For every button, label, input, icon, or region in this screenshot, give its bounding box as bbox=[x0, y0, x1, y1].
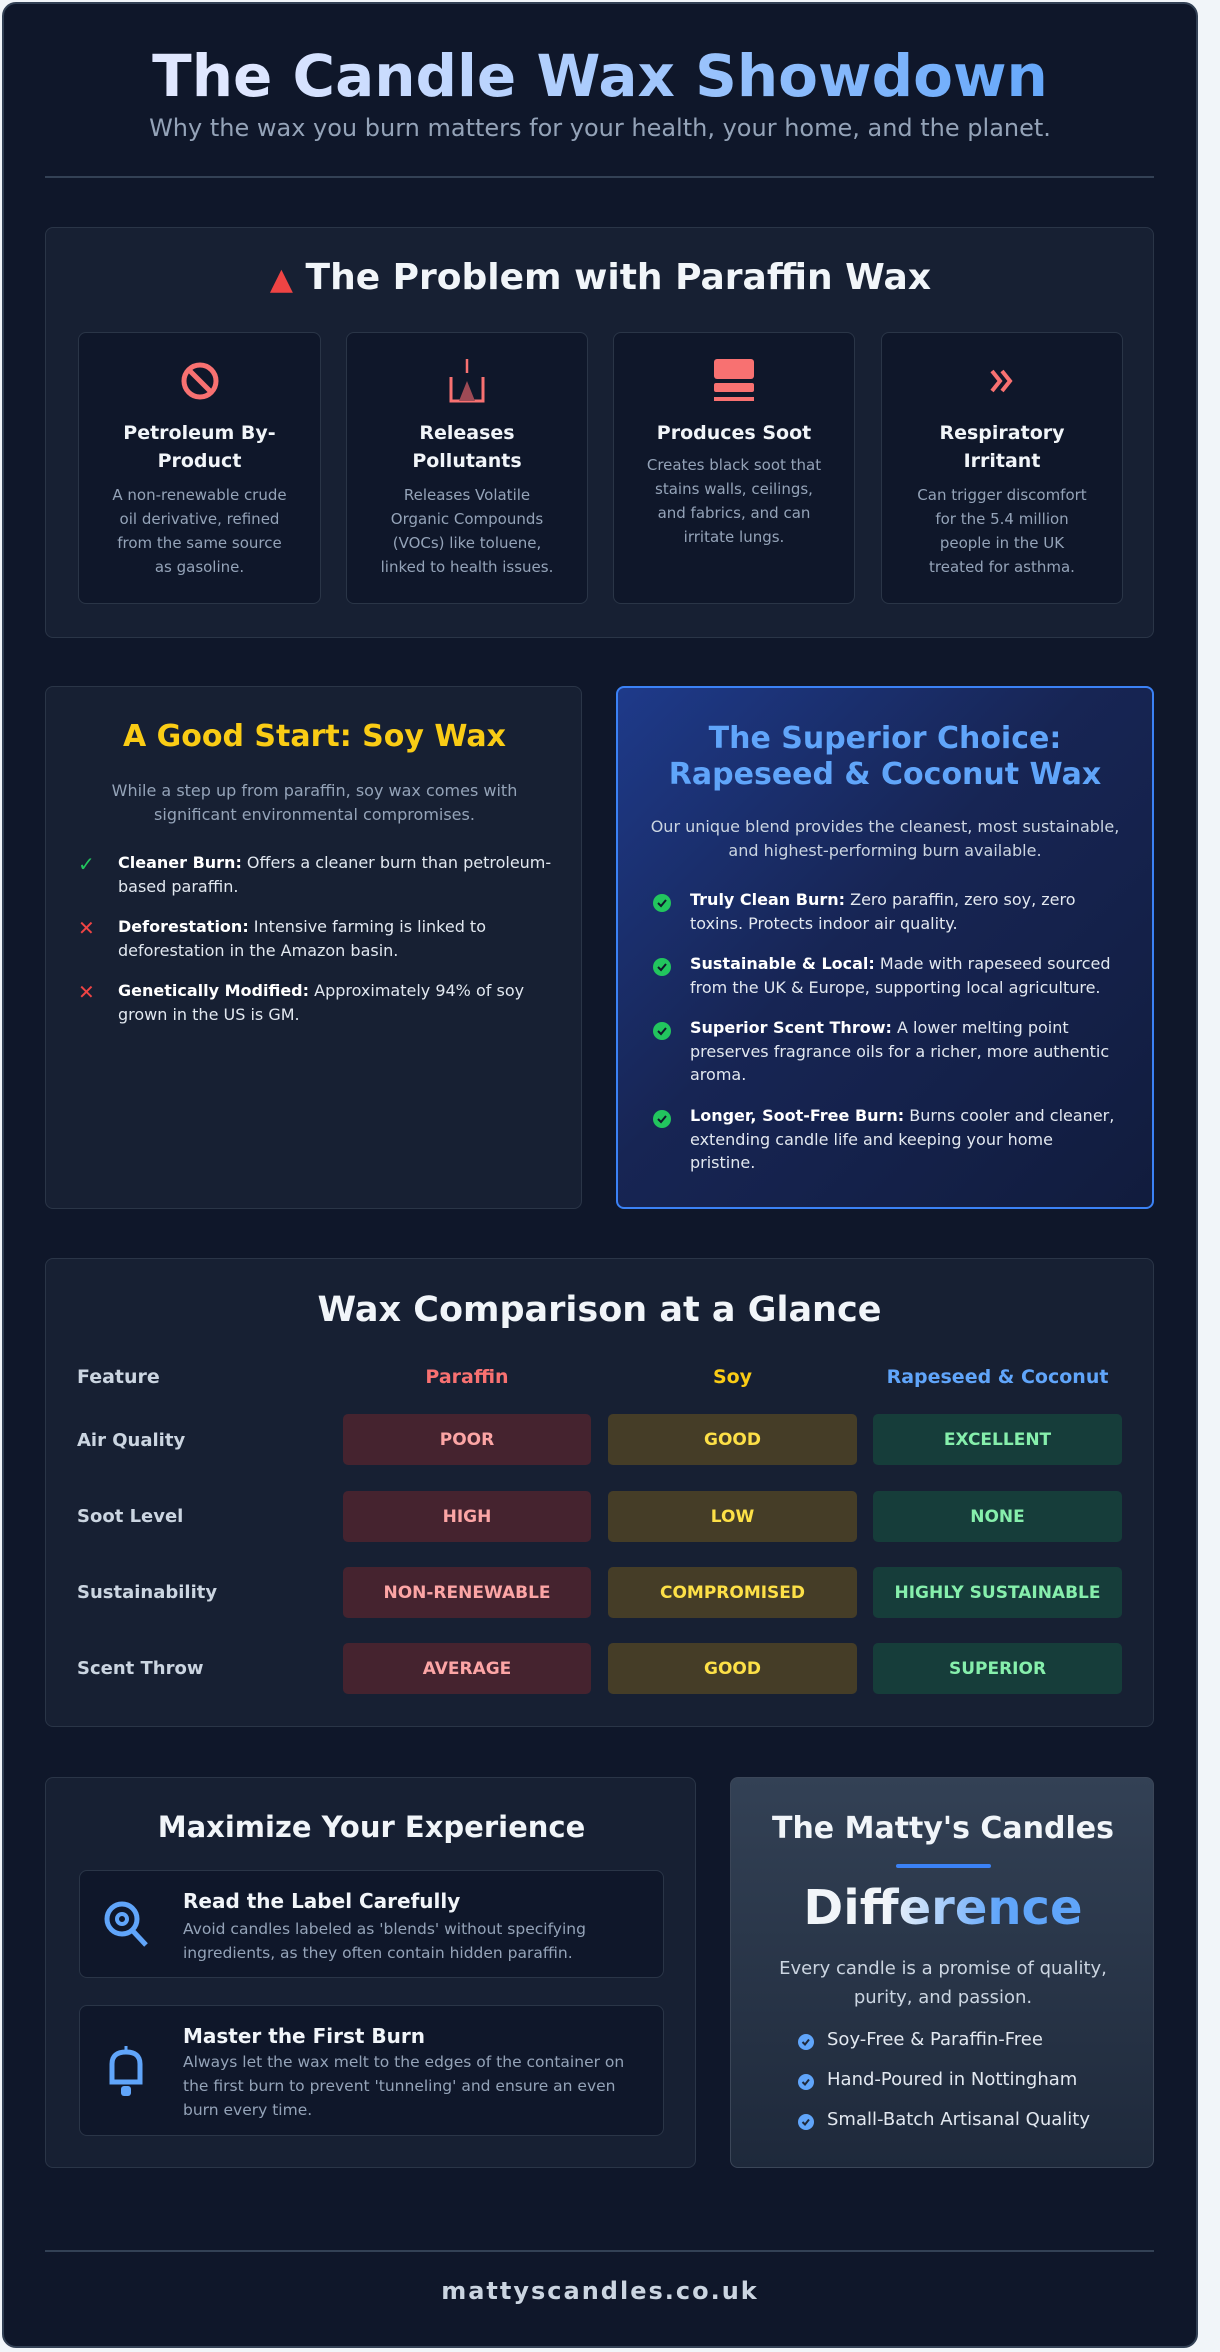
table header: Rapeseed & Coconut bbox=[887, 1366, 1108, 1388]
heading: problem: ▲ The Problem with Paraffin Wax bbox=[270, 257, 931, 298]
panel: comparison table bbox=[45, 1258, 1154, 1727]
intro: soy: While a step up from paraffin, soy wax comes with significant environmental compromises. bbox=[112, 781, 517, 824]
table rows: NONE bbox=[970, 1506, 1025, 1526]
card: soot: Produces Soot bbox=[657, 422, 811, 444]
heading: maximize: Maximize Your Experience bbox=[158, 1810, 585, 1844]
heading: difference: Difference bbox=[803, 1880, 1083, 1936]
table rows: COMPROMISED bbox=[660, 1582, 805, 1602]
table header: Feature bbox=[77, 1366, 160, 1388]
table rows bbox=[77, 1414, 1122, 1694]
table rows: GOOD bbox=[704, 1430, 761, 1450]
tip: read label: Read the Label Carefully bbox=[183, 1889, 460, 1913]
table rows: SUPERIOR bbox=[949, 1658, 1046, 1678]
text: promise: Every candle is a promise of quality, purity, and passion. bbox=[779, 1958, 1107, 2008]
table rows: HIGH bbox=[443, 1506, 491, 1526]
heading: superior choice: Rapeseed & Coconut Wax bbox=[669, 757, 1101, 792]
table rows: NON-RENEWABLE bbox=[383, 1582, 551, 1602]
table rows: GOOD bbox=[704, 1658, 761, 1678]
panel: rapeseed & coconut bbox=[616, 686, 1154, 1209]
list: features bbox=[798, 2029, 1090, 2130]
subtitle: Why the wax you burn matters for your health, your home, and the planet. bbox=[149, 114, 1051, 142]
table header: Soy bbox=[713, 1366, 752, 1388]
list: benefits: Truly Clean Burn: Zero paraffin, zero soy, zero toxins. Protects indoor air quality. bbox=[690, 890, 1076, 932]
heading: superior choice: The Superior Choice: bbox=[709, 721, 1061, 756]
heading: comparison: Wax Comparison at a Glance bbox=[318, 1290, 881, 1330]
icon: smoke bbox=[450, 359, 484, 402]
list: soy points: Cleaner Burn: Offers a cleaner burn than petroleum-based paraffin. bbox=[118, 853, 551, 896]
list: benefits: Superior Scent Throw: A lower melting point preserves fragrance oils for a richer, more authentic aroma. bbox=[690, 1018, 1109, 1084]
card: soot: Creates black soot that stains walls, ceilings, and fabrics, and can irritate lungs. bbox=[647, 456, 821, 546]
tip: read label bbox=[79, 1870, 664, 1978]
table rows: Air Quality bbox=[77, 1430, 185, 1451]
panel: soy wax bbox=[45, 686, 582, 1209]
list: soy points: ✕ bbox=[78, 980, 95, 1004]
title bbox=[0, 38, 1200, 114]
heading: superior choice bbox=[669, 721, 1101, 792]
card: petroleum bbox=[78, 332, 321, 604]
title: The Candle Wax Showdown bbox=[152, 42, 1048, 110]
table rows: LOW bbox=[711, 1506, 754, 1526]
icon: magnifier bbox=[104, 1902, 148, 1947]
list: benefits: Longer, Soot-Free Burn: Burns cooler and cleaner, extending candle life and keeping your home pristine. bbox=[690, 1106, 1114, 1172]
table header bbox=[77, 1366, 1108, 1388]
tip: read label: Avoid candles labeled as 'blends' without specifying ingredients, as they often contain hidden paraffin. bbox=[183, 1920, 586, 1962]
list: soy points: ✕ bbox=[78, 916, 95, 940]
footer url: mattyscandles.co.uk bbox=[441, 2277, 759, 2305]
tip: first burn: Master the First Burn bbox=[183, 2024, 425, 2048]
table rows: HIGHLY SUSTAINABLE bbox=[894, 1582, 1100, 1602]
heading: matty's: The Matty's Candles bbox=[772, 1811, 1114, 1846]
tip: first burn bbox=[79, 2005, 664, 2136]
icon: candle bell bbox=[110, 2046, 142, 2096]
table rows: Sustainability bbox=[77, 1582, 217, 1603]
table rows: Soot Level bbox=[77, 1506, 183, 1527]
intro: blend: Our unique blend provides the cleanest, most sustainable, and highest-performing burn available. bbox=[651, 817, 1119, 860]
panel: problem with paraffin bbox=[45, 227, 1154, 638]
card: pollutants: Releases Volatile Organic Compounds (VOCs) like toluene, linked to health issues. bbox=[381, 486, 553, 576]
card: pollutants: Releases Pollutants bbox=[412, 422, 522, 472]
card: respiratory bbox=[881, 332, 1123, 604]
card: soot bbox=[613, 332, 855, 604]
list: benefits bbox=[653, 890, 1114, 1172]
list: soy points: Genetically Modified: Approximately 94% of soy grown in the US is GM. bbox=[118, 981, 524, 1024]
panel: maximize experience bbox=[45, 1777, 696, 2168]
list: features: Small-Batch Artisanal Quality bbox=[827, 2109, 1090, 2130]
card: pollutants bbox=[346, 332, 588, 604]
table rows: AVERAGE bbox=[423, 1658, 511, 1678]
card: petroleum: A non-renewable crude oil derivative, refined from the same source as gasoline. bbox=[112, 486, 287, 576]
list: features: Hand-Poured in Nottingham bbox=[827, 2069, 1077, 2090]
list: soy points bbox=[78, 852, 551, 1024]
table rows: Scent Throw bbox=[77, 1658, 204, 1679]
table header: Paraffin bbox=[425, 1366, 509, 1388]
icon: chevrons bbox=[990, 370, 1012, 392]
list: soy points: ✓ bbox=[78, 852, 95, 876]
table rows: EXCELLENT bbox=[944, 1430, 1051, 1450]
card: petroleum: Petroleum By-Product bbox=[123, 422, 276, 472]
table rows: POOR bbox=[440, 1430, 494, 1450]
card: respiratory: Respiratory Irritant bbox=[939, 422, 1065, 472]
list: benefits: Sustainable & Local: Made with rapeseed sourced from the UK & Europe, supporting local agriculture. bbox=[690, 954, 1111, 996]
card: respiratory: Can trigger discomfort for the 5.4 million people in the UK treated for asthma. bbox=[917, 486, 1087, 576]
icon: ban bbox=[182, 362, 218, 400]
list: soy points: Deforestation: Intensive farming is linked to deforestation in the Amazon basin. bbox=[118, 917, 486, 960]
panel: matty's difference bbox=[730, 1777, 1154, 2168]
heading: soy: A Good Start: Soy Wax bbox=[123, 719, 506, 754]
icon: layers bbox=[714, 359, 754, 401]
list: features: Soy-Free & Paraffin-Free bbox=[827, 2029, 1043, 2050]
tip: first burn: Always let the wax melt to the edges of the container on the first burn to prevent 'tunneling' and ensure an even burn every time. bbox=[183, 2053, 624, 2119]
